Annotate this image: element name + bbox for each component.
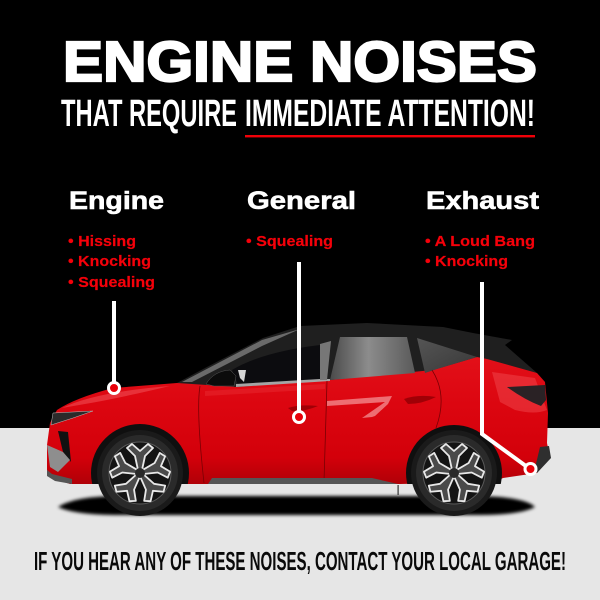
front lip — [47, 470, 72, 484]
front wheel arch — [91, 424, 189, 484]
door handle rear — [404, 396, 436, 404]
car body — [47, 352, 550, 484]
side mirror — [206, 370, 236, 386]
side sill — [208, 478, 398, 484]
rear haunch highlight — [492, 372, 547, 412]
list: exhaust noises: • Knocking — [425, 253, 508, 270]
list: engine noises: • Knocking — [68, 253, 151, 270]
pointer: exhaust — [482, 282, 536, 474]
door handle front — [288, 405, 318, 411]
panel: exhaust noises — [425, 187, 540, 270]
list: exhaust noises: • A Loud Bang — [425, 233, 535, 250]
rear wheel arch — [406, 425, 502, 484]
car shadow — [58, 496, 535, 515]
heading: exhaust: Exhaust — [426, 187, 540, 215]
subtitle: THAT REQUIRE — [61, 93, 237, 135]
door pillar — [320, 341, 331, 380]
subtitle underline — [245, 135, 535, 137]
window: front lower trim — [236, 379, 330, 387]
mirror interior highlight — [238, 370, 246, 382]
door highlight — [327, 396, 392, 418]
hood highlight — [62, 386, 170, 408]
taillight — [507, 385, 546, 406]
door lines — [199, 370, 441, 483]
panel: general noises — [246, 187, 356, 250]
front vent — [58, 431, 71, 462]
list: general noises: • Squealing — [246, 233, 333, 250]
illustration: red car — [47, 323, 551, 522]
list: exhaust noises — [425, 233, 535, 270]
roof highlight — [182, 329, 300, 382]
rear wheel — [411, 430, 497, 516]
sill post — [398, 485, 399, 495]
shoulder highlight — [205, 384, 325, 396]
list: engine noises — [68, 233, 155, 291]
window: quarter — [417, 338, 477, 373]
heading: engine: Engine — [69, 187, 164, 215]
headlight — [51, 411, 93, 425]
window: front — [232, 345, 320, 385]
pointer: engine — [108, 301, 120, 394]
front wheel — [97, 430, 183, 516]
window: rear door — [330, 337, 415, 380]
front grille — [47, 445, 70, 472]
title: ENGINE NOISES — [63, 30, 537, 94]
panel: engine noises — [68, 187, 164, 291]
rear bumper trim — [535, 446, 551, 473]
pointer: general — [294, 262, 304, 422]
black roof — [177, 323, 537, 387]
list: engine noises: • Hissing — [68, 233, 136, 250]
list: engine noises: • Squealing — [68, 274, 155, 291]
heading: general: General — [247, 187, 356, 215]
